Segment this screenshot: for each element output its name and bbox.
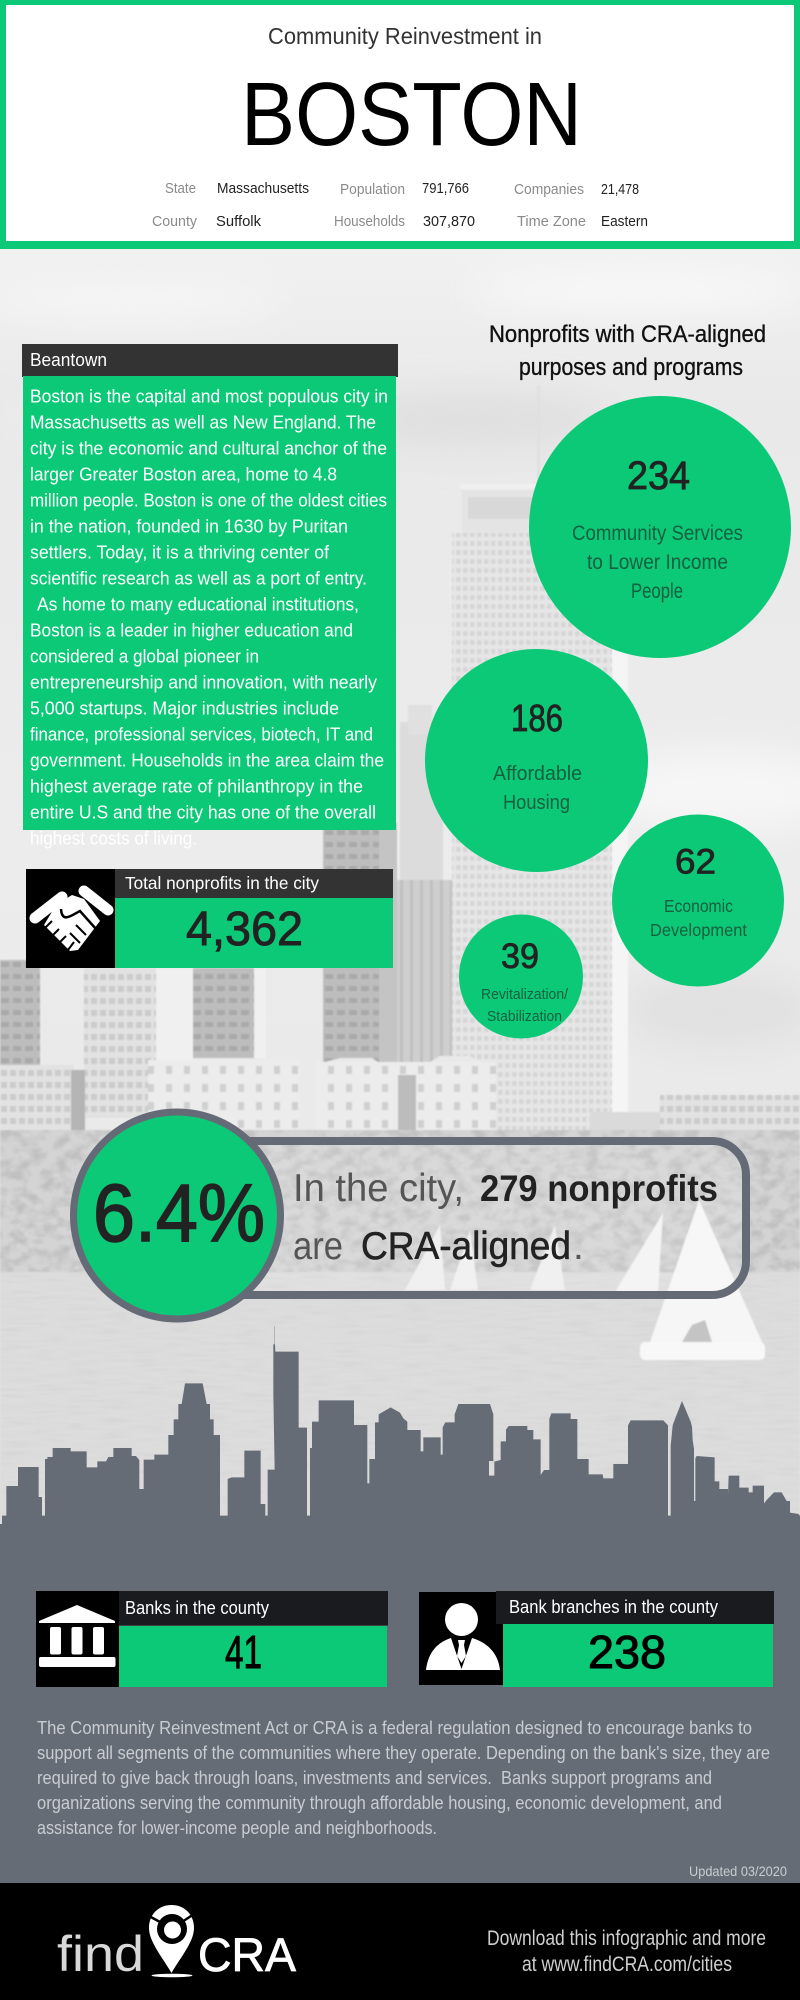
facts table: 307,870 [423, 213, 475, 230]
bubble: affordable housing: 186 [511, 698, 563, 740]
bubble: revitalization: Revitalization/ [481, 986, 569, 1003]
facts table: 791,766 [422, 180, 469, 197]
bubble: economic development: 62 [675, 842, 716, 882]
low-rise row [0, 1065, 74, 1145]
icon: person in suit [426, 1603, 500, 1670]
heading: nonprofits with CRA-aligned purposes: purposes and programs [519, 354, 743, 381]
facts table [152, 180, 648, 230]
download note [487, 1927, 766, 1976]
description text: highest costs of living. [30, 827, 197, 848]
bubble: community services: 234 [627, 454, 690, 498]
facts table: Population [340, 181, 405, 198]
stat card: bank branches in the county: 238 [588, 1626, 666, 1678]
callout text: are [293, 1225, 343, 1268]
description text: larger Greater Boston area, home to 4.8 [30, 463, 337, 484]
description text: entire U.S and the city has one of the overall [30, 801, 376, 822]
city name: BOSTON [241, 65, 582, 165]
facts table: Time Zone [517, 213, 586, 230]
description text: 5,000 startups. Major industries include [30, 697, 339, 718]
description text: settlers. Today, it is a thriving center of [30, 541, 330, 562]
facts table: Companies [514, 181, 584, 198]
Prudential tower [452, 533, 612, 1133]
text block: about the CRA [37, 1718, 770, 1838]
panel heading bar: Beantown [30, 350, 107, 370]
stat card: total nonprofits: 4,362 [186, 903, 303, 956]
bubble: affordable housing: Housing [503, 792, 570, 814]
bubble: community services [529, 396, 791, 658]
callout text: . [573, 1225, 584, 1268]
stat card: total nonprofits [26, 869, 393, 968]
bubble: community services: Community Services [572, 522, 743, 545]
bubble: affordable housing: Affordable [493, 763, 582, 785]
text block: about the CRA: The Community Reinvestment Act or CRA is a federal regulation designed to encourage banks to [37, 1718, 752, 1738]
bubble: revitalization: 39 [501, 937, 539, 976]
distant towers [400, 722, 443, 1062]
stat card: bank branches in the county [419, 1591, 774, 1687]
callout text: In the city, [293, 1167, 464, 1210]
description text: finance, professional services, biotech, IT and [30, 723, 373, 744]
heading: nonprofits with CRA-aligned purposes [489, 321, 766, 381]
icon: location pin [149, 1905, 194, 1977]
percentage: 6.4% [93, 1168, 265, 1259]
heading: nonprofits with CRA-aligned purposes: Nonprofits with CRA-aligned [489, 321, 766, 348]
logo: findCRA: find [57, 1926, 144, 1982]
facts table: Households [334, 213, 405, 230]
bubble: revitalization [459, 914, 583, 1038]
stat card: banks in the county [36, 1591, 388, 1687]
description text: in the nation, founded in 1630 by Puritan [30, 515, 348, 536]
icon: bank building [39, 1605, 116, 1667]
silhouette: city skyline [0, 1326, 800, 1884]
facts table: Eastern [601, 213, 648, 230]
facts table: Massachusetts [217, 180, 309, 197]
callout text: CRA-aligned [361, 1225, 571, 1268]
sailboats [405, 1225, 445, 1290]
bubble: economic development [612, 814, 784, 986]
facts table: County [152, 213, 197, 230]
description text: government. Households in the area claim the [30, 749, 384, 770]
description text: city is the economic and cultural anchor of the [30, 437, 387, 458]
facts table: 21,478 [601, 181, 639, 198]
facts table: Suffolk [216, 213, 261, 230]
bubble: economic development: Development [650, 920, 747, 940]
bubble: community services: to Lower Income [587, 551, 728, 574]
stat card: bank branches in the county: Bank branches in the county [509, 1597, 718, 1617]
description text: entrepreneurship and innovation, with nearly [30, 671, 378, 692]
text block: about the CRA: required to give back through loans, investments and services. Banks support programs and [37, 1768, 712, 1788]
text block: about the CRA: organizations serving the community through affordable housing, economic development, and [37, 1793, 722, 1813]
description text: considered a global pioneer in [30, 645, 259, 666]
panel: Beantown description [22, 344, 398, 848]
text block: about the CRA: assistance for lower-income people and neighborhoods. [37, 1818, 437, 1838]
description text: As home to many educational institutions, [37, 593, 359, 614]
callout text: 279 nonprofits [480, 1168, 718, 1209]
description text: Boston is a leader in higher education and [30, 619, 353, 640]
update date: Updated 03/2020 [689, 1863, 787, 1879]
footer band [0, 1883, 800, 2000]
description text: Massachusetts as well as New England. The [30, 411, 376, 432]
icon: handshake [35, 891, 108, 951]
header panel [0, 0, 800, 249]
bubble: revitalization: Stabilization [487, 1008, 562, 1025]
tree band [0, 1130, 800, 1276]
subtitle: Community Reinvestment in [268, 23, 542, 49]
logo: findCRA: CRA [198, 1928, 297, 1981]
bubble: community services: People [631, 580, 683, 603]
stat card: banks in the county: 41 [225, 1626, 262, 1678]
logo: findCRA [57, 1905, 297, 1982]
description text: Boston is the capital and most populous city in [30, 385, 388, 406]
description text: million people. Boston is one of the oldest cities [30, 489, 387, 510]
callout: 6.4% CRA-aligned [74, 1112, 746, 1319]
stat card: total nonprofits: Total nonprofits in the city [125, 873, 319, 893]
facts table: State [165, 180, 196, 197]
description text [30, 385, 388, 848]
callout text [293, 1167, 718, 1268]
description text: scientific research as well as a port of entry. [30, 567, 367, 588]
background photo: Boston skyline and harbor [0, 248, 800, 1568]
description text: highest average rate of philanthropy in the [30, 775, 363, 796]
bubble: economic development: Economic [664, 896, 733, 916]
stat card: banks in the county: Banks in the county [125, 1598, 269, 1618]
download note: at www.findCRA.com/cities [522, 1953, 732, 1976]
bubble: affordable housing [425, 649, 648, 872]
panel heading bar [22, 344, 398, 377]
water [0, 1272, 800, 1568]
